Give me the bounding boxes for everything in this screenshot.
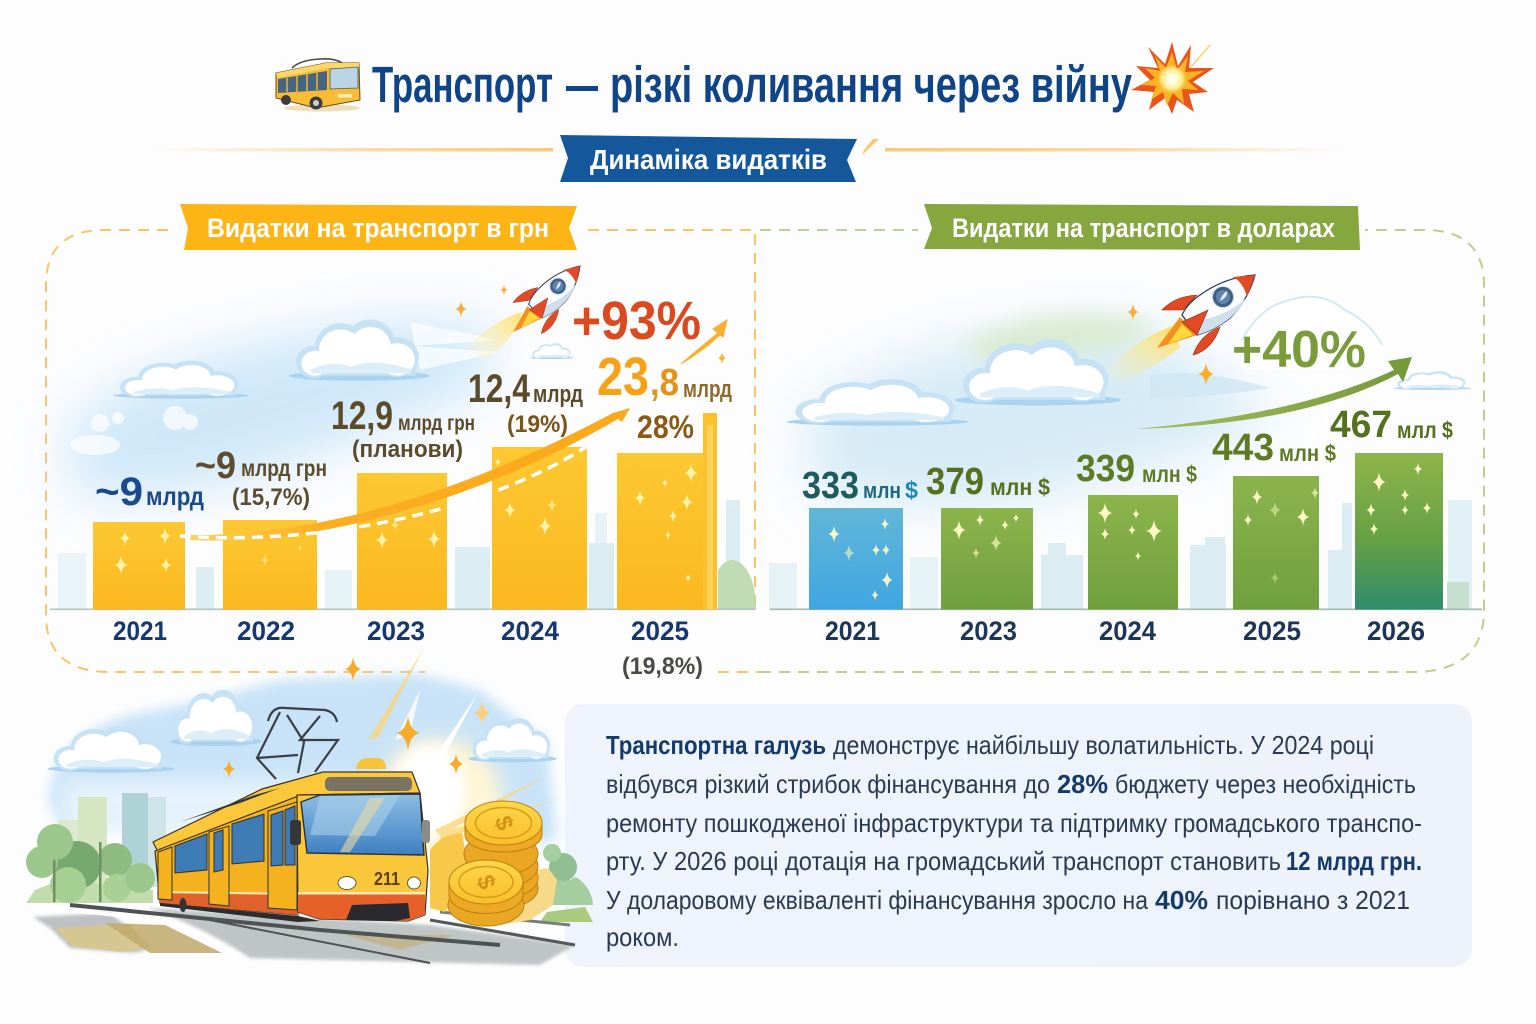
coins xyxy=(430,801,557,926)
paragraph: У доларовому еквіваленті фінансування зросло на xyxy=(606,885,1148,915)
bar 2021 xyxy=(93,522,185,610)
destination sign xyxy=(325,777,412,791)
panel: explanatory text xyxy=(565,704,1472,967)
label 2025: 28% xyxy=(637,409,694,445)
section ribbon: Динаміка видатків xyxy=(150,135,1345,182)
bar 2021 xyxy=(809,508,903,610)
background sky xyxy=(786,297,1472,510)
lights and bumper xyxy=(338,876,356,890)
icon: trolleybus xyxy=(276,59,360,112)
label 2024: млрд xyxy=(533,381,583,408)
label 2021 xyxy=(802,465,919,507)
roof light xyxy=(356,758,386,769)
label 2025: 443 xyxy=(1212,427,1274,469)
label 2021: 333 xyxy=(802,465,859,507)
label 2024 xyxy=(1076,448,1197,490)
paragraph: бюджету через необхідність xyxy=(1115,769,1416,799)
year axis xyxy=(825,616,1425,646)
year axis: 2023 xyxy=(367,616,425,646)
year axis: 2024 xyxy=(1099,616,1156,646)
label 2022: млрд грн xyxy=(241,455,327,481)
year axis xyxy=(113,616,689,646)
panel background xyxy=(565,704,1472,967)
title text: різкі коливання через війну xyxy=(610,56,1132,113)
right trees xyxy=(545,870,593,905)
bar 2026 xyxy=(1355,453,1443,610)
bars xyxy=(93,413,717,610)
baseline xyxy=(50,608,755,610)
year axis: 2021 xyxy=(113,616,167,646)
windshield xyxy=(301,794,424,855)
growth +93%: +93% xyxy=(572,291,701,351)
mirrors xyxy=(290,820,301,845)
paragraph: 12 млрд грн. xyxy=(1286,846,1422,876)
skyline xyxy=(769,500,1472,610)
side windows xyxy=(158,802,297,910)
dashed frame xyxy=(46,230,1484,672)
label 2021: ~9 xyxy=(95,470,143,514)
title text: — xyxy=(566,56,598,113)
label 2021: $ xyxy=(905,477,919,504)
rocket xyxy=(1105,275,1255,385)
value labels xyxy=(802,404,1453,507)
label 2024: (19%) xyxy=(507,411,568,438)
label 2025: ,8 xyxy=(650,362,679,404)
growth arrow xyxy=(180,408,630,541)
icon: explosion xyxy=(1131,42,1214,114)
paragraph: демонструє найбільшу волатильність. У 2024 році xyxy=(833,730,1374,760)
sparkles xyxy=(223,657,490,778)
bars xyxy=(809,453,1443,610)
heading ribbon: UAH: Видатки на транспорт в грн xyxy=(207,213,549,243)
growth arrow xyxy=(1134,357,1412,429)
label 2026 xyxy=(1330,404,1453,446)
bar 2025 xyxy=(1233,476,1319,610)
background sky xyxy=(65,320,574,500)
panel: UAH chart xyxy=(50,266,756,680)
label 2023: (планови) xyxy=(352,436,463,463)
paragraph: 28% xyxy=(1057,769,1108,799)
year axis: 2023 xyxy=(960,616,1017,646)
label 2021 xyxy=(95,470,204,514)
label 2021: млрд xyxy=(146,481,204,511)
section ribbon: Динаміка видатків: Динаміка видатків xyxy=(590,144,827,175)
label 2025: 23 xyxy=(597,347,649,407)
label 2024: 12,4 xyxy=(468,367,531,411)
city buildings xyxy=(58,793,166,893)
coin symbols: $ xyxy=(489,813,519,834)
pantograph xyxy=(257,708,338,779)
coins: $ xyxy=(471,872,501,893)
trees xyxy=(26,824,593,922)
title text: Транспорт xyxy=(372,56,553,113)
label 2023: млн $ xyxy=(990,474,1050,500)
clouds xyxy=(48,690,557,773)
year axis: 2026 xyxy=(1367,616,1425,646)
paragraph: Транспортна галузь xyxy=(606,730,826,760)
label 2025 xyxy=(597,347,732,680)
panel: USD chart xyxy=(769,275,1482,646)
label 2025: млн $ xyxy=(1279,440,1336,466)
label 2023: 379 xyxy=(926,461,984,503)
label 2025: млрд xyxy=(683,376,732,403)
baseline xyxy=(770,608,1482,610)
roof xyxy=(153,772,420,852)
label 2023: 12,9 xyxy=(331,394,393,438)
route number: 211 xyxy=(374,869,400,889)
paragraph: порівнано з 2021 xyxy=(1216,885,1410,915)
front xyxy=(297,793,428,921)
label 2023 xyxy=(926,461,1050,503)
label 2023: млрд грн xyxy=(398,412,475,435)
paragraph: ремонту пошкодженої інфраструктури та підтримку громадського транспо- xyxy=(606,808,1422,838)
paragraph: рту. У 2026 році дотація на громадський транспорт становить xyxy=(606,846,1281,876)
road and rails xyxy=(27,905,575,965)
label 2024: млн $ xyxy=(1142,461,1197,487)
light rays xyxy=(368,646,556,862)
label 2025: (19,8%) xyxy=(622,653,703,680)
value labels xyxy=(95,291,732,680)
label 2024: 339 xyxy=(1076,448,1135,490)
tram xyxy=(153,758,430,922)
sky xyxy=(48,674,557,860)
label 2021: млн xyxy=(863,478,901,503)
skyline xyxy=(58,500,756,610)
heading ribbon: UAH xyxy=(180,204,577,250)
heading ribbon: USD: Видатки на транспорт в доларах xyxy=(952,213,1335,243)
label 2023 xyxy=(331,394,475,463)
bar 2023 xyxy=(357,473,447,610)
label 2025 xyxy=(1212,427,1336,469)
bar 2023 xyxy=(941,508,1033,610)
side body xyxy=(155,795,301,915)
label 2026: 467 xyxy=(1330,404,1392,446)
label 2022 xyxy=(195,445,327,511)
year axis: 2025 xyxy=(1243,616,1301,646)
bar 2022 xyxy=(223,520,317,610)
front stack xyxy=(448,860,524,926)
label 2024 xyxy=(468,367,583,438)
title with icons xyxy=(276,42,1214,114)
heading ribbon: USD xyxy=(924,204,1360,250)
label 2022: (15,7%) xyxy=(232,484,310,511)
paragraph: 40% xyxy=(1155,885,1208,915)
rocket xyxy=(455,266,589,360)
label 2026: млл $ xyxy=(1397,417,1453,443)
label 2022: ~9 xyxy=(195,445,236,487)
growth +40%: +40% xyxy=(1232,321,1366,379)
paragraph xyxy=(606,730,1422,952)
paragraph: роком. xyxy=(606,922,679,952)
paragraph: відбувся різкий стрибок фінансування до xyxy=(606,769,1050,799)
back stack xyxy=(464,801,542,908)
illustration: tram with coins xyxy=(26,646,593,965)
title text xyxy=(372,56,1132,113)
year axis: 2025 xyxy=(631,616,689,646)
bar 2024 xyxy=(1088,495,1178,610)
year axis: 2022 xyxy=(237,616,295,646)
skirt and wheel xyxy=(160,903,320,922)
year axis: 2024 xyxy=(501,616,559,646)
bar 2024 xyxy=(492,447,587,610)
year axis: 2021 xyxy=(825,616,880,646)
bar 2025 xyxy=(617,413,717,610)
